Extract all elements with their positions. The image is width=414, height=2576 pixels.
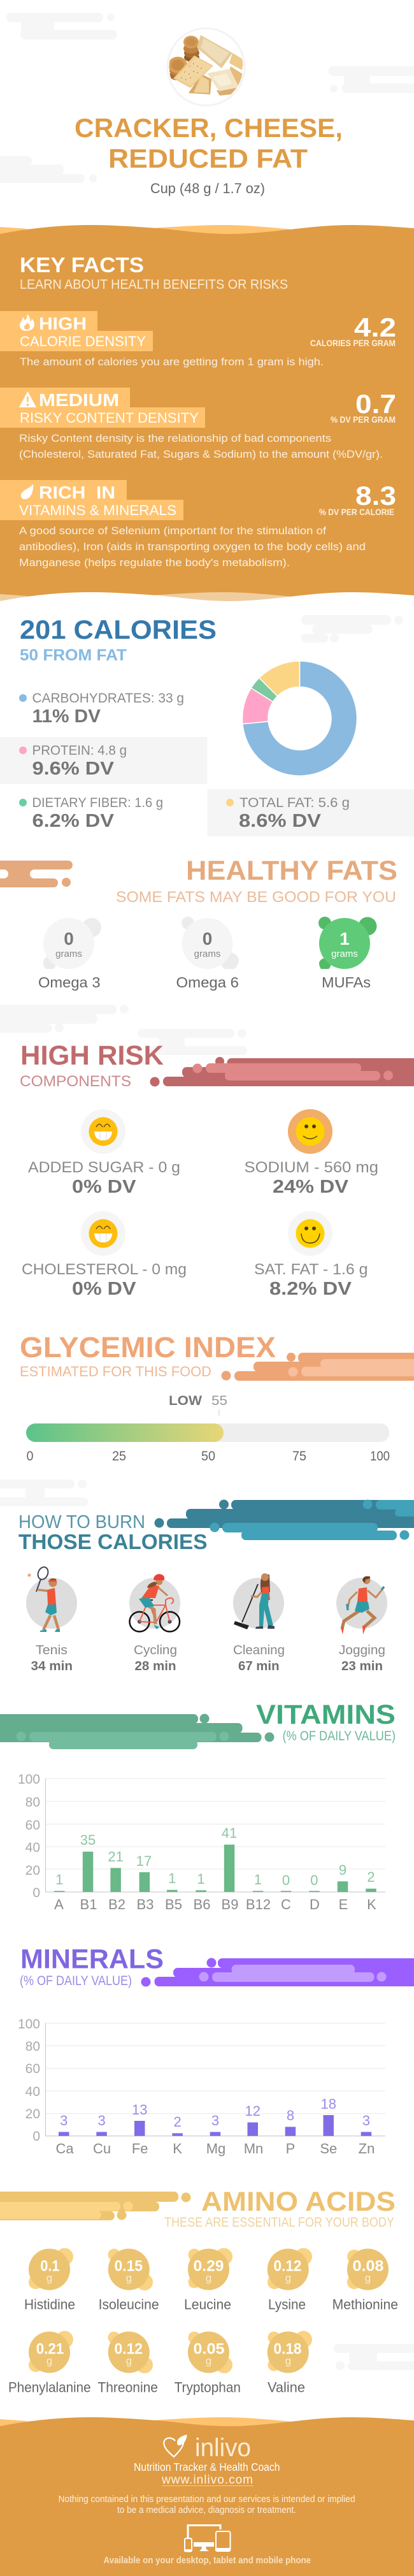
- bar chart: vitamins: B6: [194, 1896, 210, 1912]
- legend: total fat: [208, 789, 414, 836]
- heading: vitamins: VITAMINS: [256, 1699, 396, 1730]
- omega 3: grams: [55, 949, 82, 959]
- bar chart: vitamins: K: [367, 1896, 376, 1912]
- bar chart: minerals: 100: [18, 2017, 40, 2032]
- amino: methionine: [332, 2249, 398, 2313]
- fact: risky content density: 0.7: [355, 389, 396, 419]
- amino: leucine: 0.29: [194, 2258, 224, 2275]
- bar chart: minerals: Mg: [206, 2141, 225, 2157]
- activity: jogging: [336, 1576, 387, 1634]
- omega 3: Omega 3: [38, 974, 101, 991]
- title: CRACKER, CHEESE,: [75, 113, 343, 143]
- tagline: Nutrition Tracker & Health Coach: [134, 2461, 280, 2473]
- fact: risky content density: (Cholesterol, Saturated Fat, Sugars & Sodium) to the amount (%DV/gr).: [19, 448, 383, 460]
- bar chart: minerals: 3: [211, 2113, 219, 2128]
- serving size: Cup (48 g / 1.7 oz): [150, 180, 265, 196]
- component: added sugar: ADDED SUGAR - 0 g: [28, 1159, 180, 1176]
- bar chart: vitamins: 20: [25, 1863, 40, 1878]
- bar chart: vitamins: [18, 1772, 385, 1912]
- panel: glycemic index: [20, 1331, 414, 1464]
- amino: isoleucine: 0.15: [115, 2258, 143, 2275]
- bar chart: vitamins: 41: [222, 1825, 237, 1841]
- bar chart: minerals: 18: [321, 2096, 336, 2112]
- bar chart: vitamins: 35: [80, 1832, 96, 1848]
- legend: carbohydrates: CARBOHYDRATES: 33 g: [32, 691, 184, 706]
- bar chart: vitamins: B5: [165, 1896, 182, 1912]
- fact: rich in vitamins and minerals: [0, 480, 396, 569]
- bar chart: vitamins: B3: [137, 1896, 153, 1912]
- activity labels: jogging: [339, 1643, 385, 1673]
- fact: risky content density: Risky Content density is the relationship of bad components: [19, 432, 331, 444]
- icon: flame: [20, 314, 34, 331]
- bar chart: vitamins: 80: [25, 1795, 40, 1810]
- mufas: MUFAs: [322, 974, 371, 991]
- bar chart: vitamins: 21: [108, 1849, 124, 1865]
- gauge label: [169, 1394, 227, 1416]
- amino: isoleucine: Isoleucine: [99, 2297, 159, 2313]
- fact: risky content density: [0, 388, 396, 460]
- gauge scale: 100: [370, 1449, 390, 1464]
- legend: dietary fiber: 6.2% DV: [32, 811, 115, 831]
- subheading: components: COMPONENTS: [20, 1073, 131, 1090]
- gauge scale: 25: [112, 1449, 126, 1464]
- omega 6: 0: [203, 929, 212, 949]
- panel: amino acids: [0, 2187, 398, 2396]
- bar chart: vitamins: 2: [367, 1869, 375, 1885]
- subheading: ESTIMATED FOR THIS FOOD: [20, 1364, 211, 1379]
- title: REDUCED FAT: [108, 143, 308, 173]
- bar chart: vitamins: 0: [310, 1872, 318, 1888]
- bar chart: minerals: Mn: [244, 2141, 263, 2157]
- amino: threonine: g: [126, 2355, 132, 2367]
- bar chart: minerals: 3: [362, 2113, 370, 2128]
- heading: HOW TO BURN: [18, 1512, 145, 1532]
- bar chart: vitamins: 60: [25, 1818, 40, 1833]
- omega 6: Omega 6: [176, 974, 239, 991]
- omega 3: [38, 918, 101, 991]
- amino: phenylalanine: 0.21: [36, 2341, 64, 2358]
- icon: crackers photo: [168, 28, 245, 106]
- mufas: grams: [331, 949, 358, 959]
- bar chart: minerals: Fe: [132, 2141, 148, 2157]
- activity labels: cycling: [134, 1643, 177, 1673]
- amino: lysine: 0.12: [274, 2258, 302, 2275]
- bar chart: vitamins: A: [54, 1896, 64, 1912]
- bar chart: vitamins: 1: [168, 1870, 176, 1886]
- legend: dietary fiber: DIETARY FIBER: 1.6 g: [32, 796, 163, 810]
- fact: calorie density: The amount of calories you are getting from 1 gram is high.: [20, 356, 324, 368]
- amino: lysine: Lysine: [268, 2297, 306, 2313]
- mufas: 1: [339, 929, 350, 949]
- decorative banner: [0, 1714, 274, 1749]
- bar chart: vitamins: C: [281, 1896, 291, 1912]
- component: cholesterol: CHOLESTEROL - 0 mg: [22, 1261, 187, 1278]
- activity labels: cycling: 28 min: [135, 1659, 176, 1673]
- activity labels: cleaning: Cleaning: [233, 1643, 285, 1657]
- bar chart: minerals: 3: [97, 2113, 106, 2128]
- amino: lysine: g: [285, 2272, 291, 2284]
- bar chart: minerals: P: [286, 2141, 295, 2157]
- bar chart: vitamins: B9: [222, 1896, 238, 1912]
- activity labels: cycling: Cycling: [134, 1643, 177, 1657]
- amino: histidine: 0.1: [40, 2258, 59, 2275]
- decorative banner: [150, 1057, 414, 1086]
- bar chart: vitamins: E: [339, 1896, 348, 1912]
- fact: risky content density: RISKY CONTENT DENSITY: [20, 410, 199, 426]
- icon: leaf: [21, 484, 33, 499]
- bar chart: vitamins: 1: [254, 1872, 262, 1888]
- omega 6: [176, 917, 239, 991]
- heading: key facts: KEY FACTS: [20, 253, 144, 277]
- fact: risky content density: % DV PER GRAM: [331, 414, 396, 425]
- amino: tryptophan: 0.05: [194, 2341, 224, 2358]
- panel: how to burn those calories: THOSE CALORIES: [18, 1530, 208, 1554]
- mufas: [318, 917, 377, 991]
- fact: calorie density: 4.2: [354, 312, 396, 342]
- fact: calorie density: CALORIES PER GRAM: [310, 338, 396, 348]
- fact: calorie density: [0, 311, 396, 368]
- amino: methionine: g: [365, 2272, 371, 2284]
- decorative banner: [154, 1499, 414, 1540]
- subheading: LEARN ABOUT HEALTH BENEFITS OR RISKS: [20, 277, 288, 292]
- amino: valine: 0.18: [274, 2341, 302, 2358]
- panel: high risk components: [20, 1040, 414, 1299]
- bar chart: minerals: 60: [25, 2062, 40, 2076]
- amino: threonine: Threonine: [97, 2380, 158, 2396]
- fact: risky content density: MEDIUM: [39, 390, 119, 410]
- bar chart: vitamins: 0: [32, 1886, 40, 1900]
- subheading: 50 from fat: 50 FROM FAT: [20, 646, 127, 664]
- amino: tryptophan: [175, 2332, 241, 2396]
- fact: calorie density: CALORIE DENSITY: [20, 333, 146, 349]
- bar chart: minerals: [18, 2017, 385, 2157]
- amino: valine: Valine: [268, 2380, 305, 2396]
- panel: vitamins: [0, 1699, 396, 1912]
- gauge bar: [26, 1423, 390, 1442]
- component: cholesterol: 0% DV: [72, 1279, 136, 1299]
- decorative banner: [0, 861, 73, 887]
- component: sodium: 24% DV: [273, 1177, 349, 1197]
- bar chart: minerals: 80: [25, 2039, 40, 2054]
- amino: valine: g: [285, 2355, 291, 2367]
- bar chart: minerals: 8: [287, 2107, 294, 2123]
- fact: rich in vitamins and minerals: A good source of Selenium (important for the stimulation of: [19, 525, 326, 537]
- fact: rich in vitamins and minerals: 8.3: [355, 481, 396, 511]
- component: saturated fat: SAT. FAT - 1.6 g: [254, 1261, 368, 1278]
- website link: www.inlivo.com: [161, 2473, 253, 2487]
- activity labels: tenis: [31, 1643, 73, 1673]
- amino: isoleucine: g: [126, 2272, 132, 2284]
- bar chart: minerals: 2: [173, 2114, 182, 2130]
- heading: amino acids: AMINO ACIDS: [201, 2187, 396, 2217]
- component: cholesterol: [22, 1211, 187, 1299]
- amino: isoleucine: [99, 2249, 159, 2313]
- bar chart: vitamins: 1: [197, 1871, 205, 1887]
- availability note: Available on your desktop, tablet and mobile phone: [103, 2555, 311, 2566]
- panel: key facts: [0, 225, 414, 606]
- bar chart: vitamins: B12: [246, 1896, 271, 1912]
- component: saturated fat: 8.2% DV: [269, 1279, 352, 1299]
- amino: histidine: Histidine: [24, 2297, 75, 2313]
- activity labels: jogging: 23 min: [341, 1659, 383, 1673]
- heading: healthy fats: HEALTHY FATS: [186, 855, 397, 886]
- bar chart: minerals: Ca: [55, 2141, 74, 2157]
- heading: minerals: MINERALS: [20, 1944, 164, 1975]
- amino: valine: [268, 2331, 312, 2396]
- legend: total fat: TOTAL FAT: 5.6 g: [239, 796, 350, 810]
- decorative banner: [0, 2192, 191, 2220]
- amino: threonine: [97, 2332, 158, 2396]
- legend: dietary fiber: [19, 796, 163, 831]
- amino: methionine: Methionine: [332, 2297, 398, 2313]
- panel: healthy fats: [0, 855, 397, 991]
- bar chart: vitamins: B2: [108, 1896, 125, 1912]
- component: saturated fat: [254, 1211, 368, 1299]
- bar chart: minerals: Se: [320, 2141, 337, 2157]
- legend: carbohydrates: [19, 691, 184, 727]
- decorative banner: [222, 1353, 414, 1381]
- bar chart: minerals: 20: [25, 2107, 40, 2121]
- title: [75, 113, 343, 173]
- bar chart: vitamins: 0: [282, 1872, 290, 1888]
- bar chart: minerals: Zn: [359, 2141, 375, 2157]
- legend: carbohydrates: 11% DV: [32, 706, 101, 727]
- bar chart: minerals: Cu: [93, 2141, 111, 2157]
- heading: glycemic index: GLYCEMIC INDEX: [20, 1331, 276, 1364]
- disclaimer: [59, 2494, 355, 2515]
- logo: inlivo: inlivo: [195, 2434, 251, 2462]
- bar chart: minerals: 3: [60, 2113, 68, 2128]
- bar chart: minerals: 13: [132, 2102, 148, 2118]
- heading: 201 calories: 201 CALORIES: [20, 615, 217, 644]
- gauge scale: [27, 1449, 390, 1464]
- panel: calories: [0, 615, 414, 836]
- fact: calorie density: HIGH: [39, 314, 87, 333]
- amino: leucine: Leucine: [184, 2297, 231, 2313]
- amino: phenylalanine: g: [46, 2355, 52, 2367]
- activity labels: tenis: Tenis: [36, 1643, 68, 1657]
- bar chart: vitamins: 9: [339, 1862, 346, 1878]
- amino: phenylalanine: Phenylalanine: [8, 2380, 91, 2396]
- panel: footer: [0, 2417, 414, 2576]
- activity labels: jogging: Jogging: [339, 1643, 385, 1657]
- activity: cycling: [129, 1574, 180, 1632]
- bar chart: vitamins: 17: [136, 1853, 152, 1869]
- gauge label: LOW: [169, 1394, 202, 1408]
- subheading: SOME FATS MAY BE GOOD FOR YOU: [116, 889, 396, 906]
- activity labels: tenis: 34 min: [31, 1659, 73, 1673]
- bar chart: minerals: 40: [25, 2085, 40, 2099]
- amino: phenylalanine: [8, 2331, 91, 2396]
- amino: tryptophan: Tryptophan: [175, 2380, 241, 2396]
- icon: warning: [19, 391, 36, 407]
- fact: rich in vitamins and minerals: RICH IN: [39, 483, 115, 502]
- amino: histidine: g: [46, 2272, 52, 2284]
- activity labels: cleaning: [233, 1643, 285, 1673]
- gauge label: 55: [211, 1394, 227, 1408]
- bar chart: minerals: K: [173, 2141, 182, 2157]
- legend: protein: [0, 737, 208, 784]
- logo: inlivo: [164, 2434, 251, 2462]
- bar chart: vitamins: 40: [25, 1840, 40, 1855]
- panel: minerals: [18, 1944, 414, 2157]
- omega 6: grams: [194, 949, 220, 959]
- amino: leucine: g: [206, 2272, 211, 2284]
- component: sodium: [245, 1109, 378, 1197]
- gauge scale: 0: [27, 1449, 33, 1464]
- panel: how to burn those calories: [18, 1499, 414, 1673]
- fact: rich in vitamins and minerals: antibodies), Iron (aids in transporting oxygen to the body cells) and: [19, 541, 366, 553]
- component: sodium: SODIUM - 560 mg: [245, 1159, 378, 1176]
- disclaimer: Nothing contained in this presentation and our services is intended or implied: [59, 2494, 355, 2505]
- icon: devices: [184, 2526, 231, 2552]
- amino: methionine: 0.08: [353, 2258, 383, 2275]
- gauge scale: 75: [292, 1449, 306, 1464]
- activity: tennis: [26, 1566, 77, 1632]
- component: added sugar: 0% DV: [72, 1177, 136, 1197]
- bar chart: vitamins: 100: [18, 1772, 40, 1787]
- amino: lysine: [268, 2248, 312, 2313]
- fact: rich in vitamins and minerals: % DV PER CALORIE: [319, 507, 394, 517]
- donut chart: [242, 661, 357, 776]
- amino: tryptophan: g: [206, 2355, 211, 2367]
- gauge scale: 50: [201, 1449, 215, 1464]
- bar chart: vitamins: 1: [55, 1872, 63, 1888]
- bar chart: minerals: 12: [245, 2103, 261, 2119]
- activity: cleaning: [233, 1573, 284, 1629]
- legend: protein: PROTEIN: 4.8 g: [32, 743, 127, 758]
- component: added sugar: [28, 1109, 180, 1197]
- fact: rich in vitamins and minerals: Manganese (helps regulate the body's metabolism).: [19, 557, 290, 569]
- legend: total fat: 8.6% DV: [239, 811, 322, 831]
- heading: high risk: HIGH RISK: [20, 1040, 164, 1071]
- amino: threonine: 0.12: [115, 2341, 143, 2358]
- activity labels: cleaning: 67 min: [238, 1659, 279, 1673]
- bar chart: minerals: 0: [32, 2129, 40, 2144]
- fact: rich in vitamins and minerals: VITAMINS & MINERALS: [19, 502, 176, 518]
- subheading: (% OF DAILY VALUE): [20, 1974, 132, 1988]
- disclaimer: to be a medical advice, diagnosis or treatment.: [117, 2505, 296, 2515]
- subheading: (% OF DAILY VALUE): [283, 1729, 396, 1743]
- bar chart: vitamins: B1: [80, 1896, 97, 1912]
- decorative banner: [141, 1958, 414, 1986]
- amino: histidine: [24, 2248, 75, 2313]
- omega 3: 0: [64, 929, 74, 949]
- amino: leucine: [184, 2248, 232, 2313]
- bar chart: vitamins: D: [310, 1896, 320, 1912]
- legend: protein: 9.6% DV: [32, 759, 115, 779]
